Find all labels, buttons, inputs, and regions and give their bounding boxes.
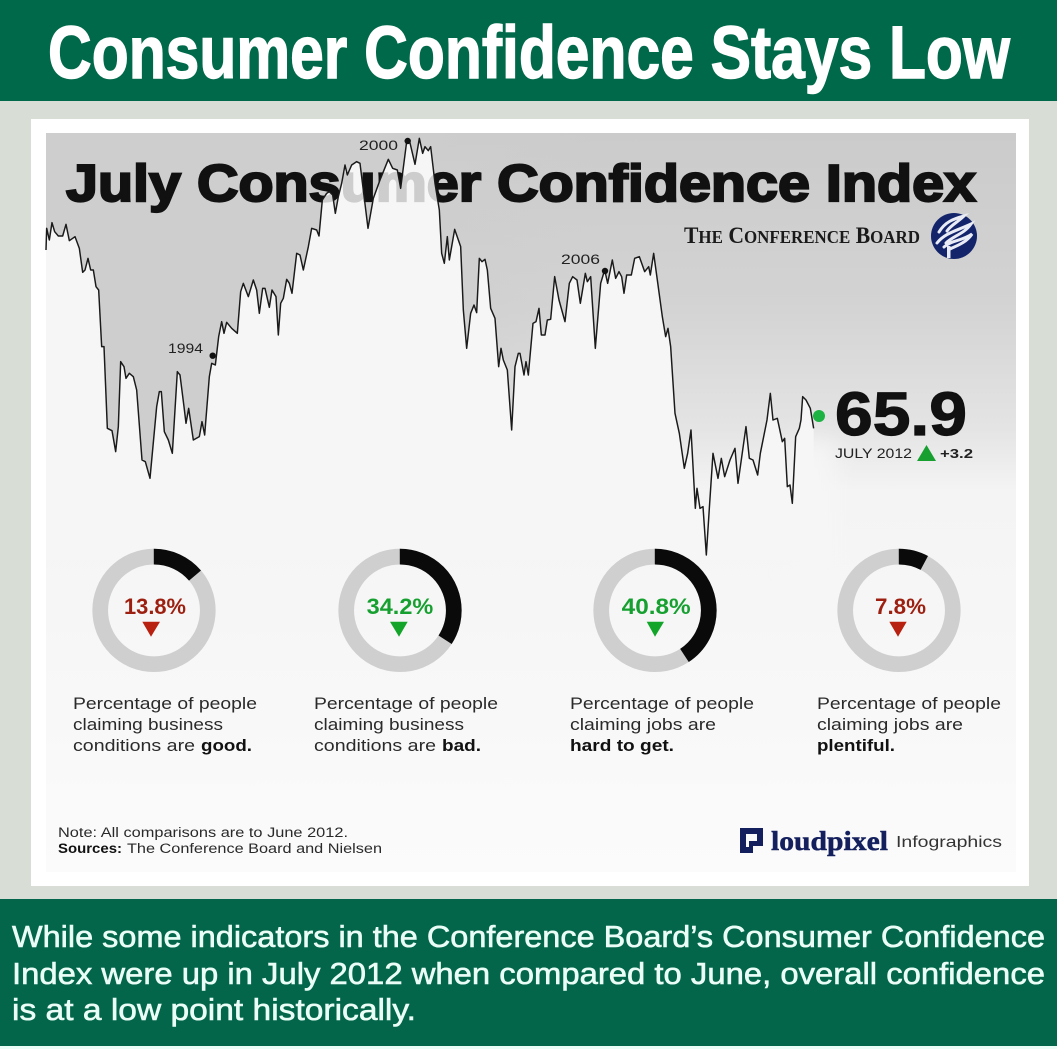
- marker: 2000: 2000: [359, 138, 398, 153]
- loudpixel logo: loudpixel: [771, 826, 889, 856]
- caption: business bad: claiming business: [314, 715, 464, 734]
- caption: business bad: Percentage of people: [314, 694, 498, 713]
- marker: 1994: 1994: [168, 341, 204, 356]
- big number: 65.9: 65.9: [835, 380, 967, 448]
- caption: business bad: [314, 694, 498, 755]
- note and sources: Sources:: [58, 841, 122, 856]
- caption: business good: good.: [201, 736, 252, 755]
- donut: business good 13.8%: [100, 557, 208, 664]
- heading portion behind chart: July Consumer Confidence Index: [66, 155, 976, 213]
- footer text: While some indicators in the Conference Board’s Consumer Confidence: [12, 919, 1045, 954]
- marker: 2006: 2006: [561, 252, 600, 267]
- soft blend at chart edge: [795, 440, 835, 570]
- caption: jobs plentiful: [817, 694, 1001, 755]
- line chart: index history: [46, 138, 814, 555]
- heading: July Consumer Confidence Index: July Consumer Confidence Index: [66, 155, 976, 213]
- caption: business good: Percentage of people: [73, 694, 257, 713]
- donut: jobs plentiful 7.8%: [845, 557, 953, 664]
- loudpixel logo: Infographics: [896, 834, 1002, 851]
- footer text: [12, 919, 1045, 1027]
- caption: jobs hard to get: claiming jobs are: [570, 715, 716, 734]
- panel: infographic: [46, 133, 1016, 872]
- caption: business good: [73, 694, 257, 755]
- change: July 2012 +3.2: JULY 2012: [835, 446, 912, 461]
- marker: 2000: [359, 138, 411, 153]
- footer text: Index were up in July 2012 when compared to June, overall confidence: [12, 956, 1045, 991]
- panel background: [46, 133, 1016, 872]
- note and sources: The Conference Board and Nielsen: [127, 841, 382, 856]
- loudpixel logo: [740, 826, 1002, 856]
- The Conference Board wordmark: THE CONFERENCE BOARD: [684, 223, 920, 248]
- change: July 2012 +3.2: +3.2: [940, 446, 973, 461]
- caption: jobs hard to get: hard to get.: [570, 736, 674, 755]
- chart area above line: [46, 133, 814, 555]
- chart area below line: [46, 138, 814, 560]
- footer text: is at a low point historically.: [12, 992, 416, 1027]
- donut: jobs plentiful 7.8%: 7.8%: [875, 594, 926, 619]
- footer banner: [0, 899, 1057, 1049]
- caption: business bad: conditions are: [314, 736, 436, 755]
- donut: business bad 34.2%: 34.2%: [367, 594, 433, 619]
- current value marker: [813, 410, 825, 422]
- marker: 1994: [168, 341, 216, 359]
- note and sources: Note: All comparisons are to June 2012.: [58, 825, 348, 840]
- icon: Conference Board tree logo: [931, 213, 977, 259]
- caption: jobs plentiful: Percentage of people: [817, 694, 1001, 713]
- marker: 2006: [561, 252, 608, 274]
- header banner: [0, 0, 1057, 101]
- donut: jobs hard to get 40.8%: [601, 557, 709, 664]
- caption: jobs plentiful: plentiful.: [817, 736, 895, 755]
- caption: jobs hard to get: Percentage of people: [570, 694, 754, 713]
- caption: business bad: bad.: [442, 736, 481, 755]
- donut: business good 13.8%: 13.8%: [124, 594, 186, 619]
- caption: business good: claiming business: [73, 715, 223, 734]
- note and sources: [58, 825, 382, 856]
- change: July 2012 +3.2: [835, 445, 973, 461]
- donut: business bad 34.2%: [346, 557, 454, 664]
- donut: jobs hard to get 40.8%: 40.8%: [622, 594, 691, 619]
- icon: loudpixel mark: [740, 828, 763, 853]
- white frame: [31, 119, 1029, 886]
- caption: jobs hard to get: [570, 694, 754, 755]
- caption: business good: conditions are: [73, 736, 195, 755]
- caption: jobs plentiful: claiming jobs are: [817, 715, 963, 734]
